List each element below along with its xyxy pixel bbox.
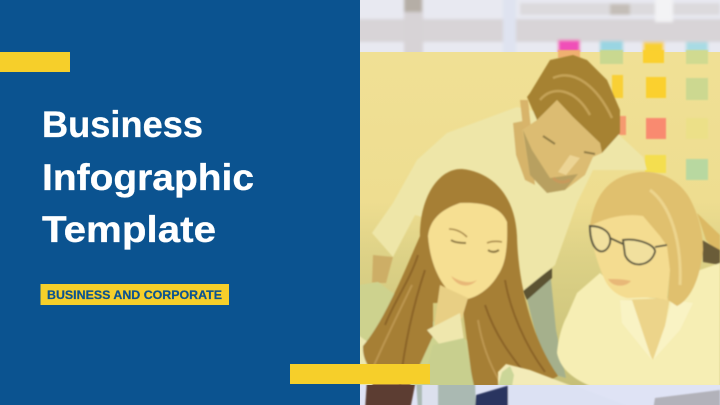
photo: bottom strip with open folder [360, 385, 720, 405]
accent bar: top left [0, 52, 70, 72]
accessory: glasses [590, 226, 667, 264]
photo: sticky notes [558, 50, 708, 180]
person: blonde woman with glasses [557, 172, 720, 386]
photo: open folder on the desk [498, 364, 572, 386]
panel: blue background [0, 0, 360, 405]
subtitle badge [40, 284, 229, 305]
title [42, 104, 254, 250]
photo: yellow tinted wall [360, 52, 720, 385]
badge text: BUSINESS AND CORPORATE [47, 290, 222, 302]
title line 2: Infographic [42, 157, 254, 198]
title line 3: Template [42, 209, 216, 250]
title line 1: Business [42, 104, 203, 145]
accent bar: bottom centre [290, 364, 430, 384]
photo: blurred office background strip [360, 0, 720, 52]
badge background [40, 284, 229, 305]
photo: team looking at a document [340, 0, 720, 405]
person: woman with long hair [358, 169, 558, 390]
person: man with brown hair [372, 55, 647, 378]
